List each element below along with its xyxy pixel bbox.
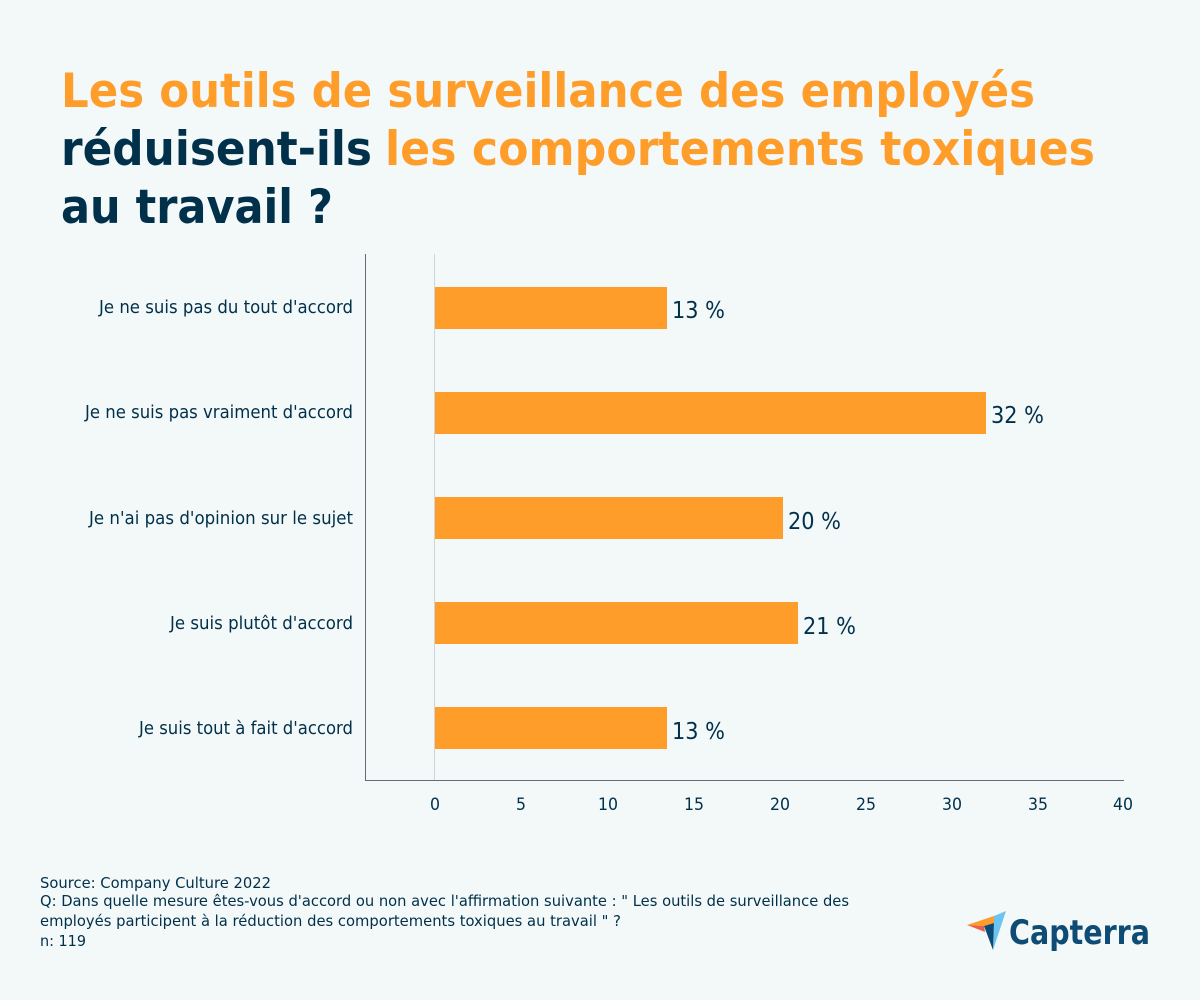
value labels: 32 % [991, 403, 1044, 429]
source note: Q: Dans quelle mesure êtes-vous d'accord ou non avec l'affirmation suivante : " Les outils de surveillance des [40, 892, 849, 910]
title: les comportements toxiques [385, 122, 1095, 177]
x axis labels: 25 [856, 795, 876, 815]
x axis labels: 40 [1113, 795, 1133, 815]
x axis labels: 0 [430, 795, 440, 815]
source note: n: 119 [40, 932, 86, 950]
source note: employés participent à la réduction des comportements toxiques au travail " ? [40, 912, 621, 930]
title [61, 64, 1095, 235]
category labels: Je ne suis pas vraiment d'accord [84, 403, 353, 423]
x axis labels: 20 [770, 795, 790, 815]
value labels: 21 % [803, 614, 856, 640]
category labels [84, 298, 353, 739]
x axis labels: 5 [516, 795, 526, 815]
bars [435, 287, 986, 749]
x axis labels: 15 [684, 795, 704, 815]
x axis labels: 30 [942, 795, 962, 815]
title: au travail ? [61, 180, 333, 235]
category labels: Je suis tout à fait d'accord [138, 719, 353, 739]
category labels: Je ne suis pas du tout d'accord [98, 298, 353, 318]
x axis labels [430, 795, 1133, 815]
icon: Capterra logo [967, 911, 1150, 953]
value labels: 20 % [788, 509, 841, 535]
x axis labels: 10 [598, 795, 618, 815]
value labels: 13 % [672, 298, 725, 324]
value labels: 13 % [672, 719, 725, 745]
source note: Source: Company Culture 2022 [40, 874, 271, 892]
category labels: Je suis plutôt d'accord [169, 614, 353, 634]
title: réduisent-ils [61, 122, 372, 177]
category labels: Je n'ai pas d'opinion sur le sujet [88, 509, 353, 529]
source note [40, 874, 849, 950]
value labels [672, 298, 1044, 745]
x axis labels: 35 [1028, 795, 1048, 815]
title: Les outils de surveillance des employés [61, 64, 1035, 119]
bar chart [84, 254, 1133, 815]
icon: Capterra logo: Capterra [1009, 913, 1150, 953]
